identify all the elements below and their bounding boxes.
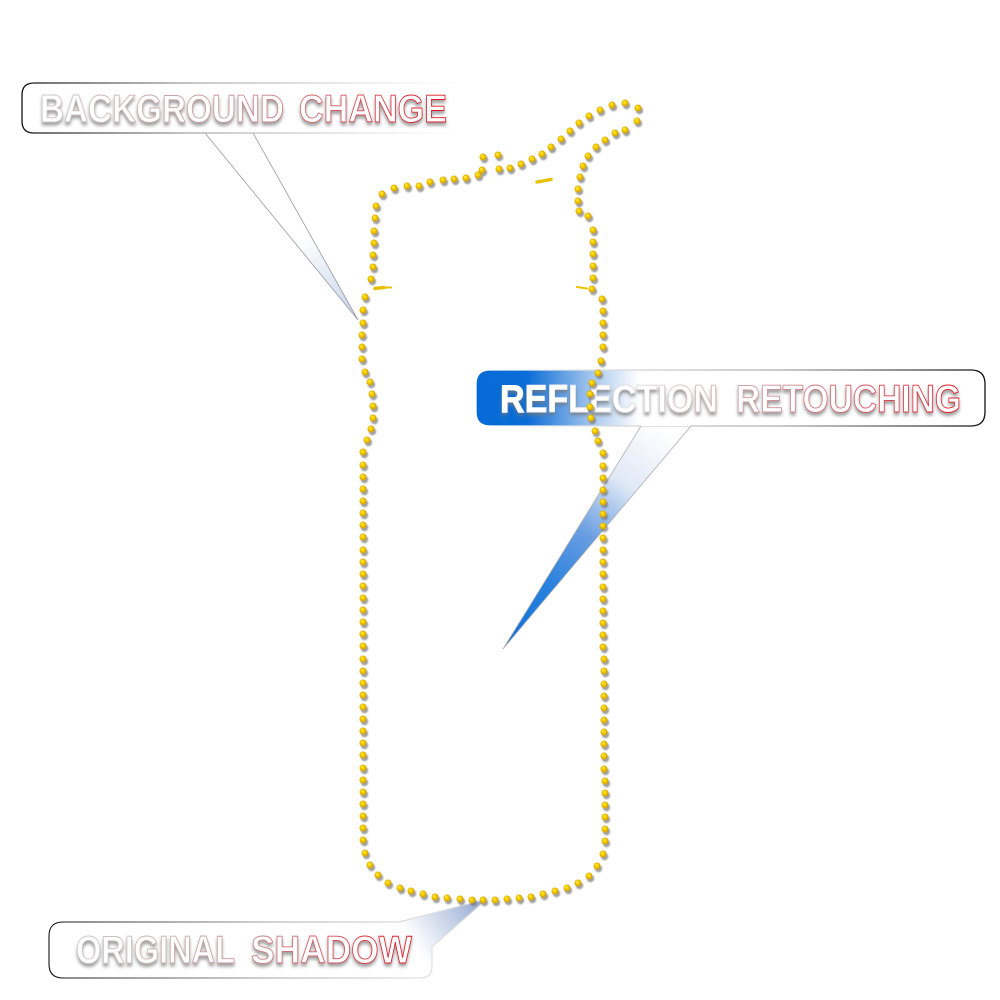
label: background change: CHANGE: [299, 88, 447, 131]
label: original shadow: SHADOW: [251, 929, 412, 972]
callout: original shadow: [49, 899, 487, 978]
dotted bottle outline: [361, 102, 640, 903]
label box and pointer: original shadow: [49, 899, 487, 978]
label: reflection retouching: [500, 378, 961, 421]
label: original shadow: ORIGINAL: [76, 929, 235, 972]
label: original shadow: [76, 929, 412, 972]
callout: background change: [22, 83, 460, 320]
pointer: background change: [205, 133, 358, 320]
label: reflection retouching: REFLECTION: [500, 378, 718, 421]
callout: reflection retouching: [476, 370, 985, 649]
label: reflection retouching: RETOUCHING: [736, 378, 961, 421]
label: background change: BACKGROUND: [40, 88, 284, 131]
label box: background change: [22, 83, 460, 133]
label box: reflection retouching: [476, 370, 985, 426]
pointer: reflection retouching: [503, 426, 691, 649]
